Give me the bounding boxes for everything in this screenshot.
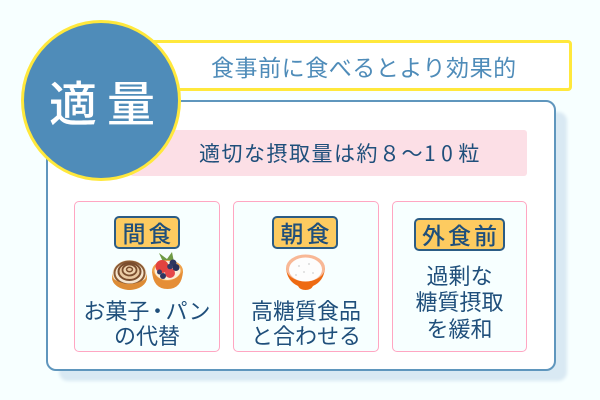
subheading text: 食事前に食べるとより効果的	[211, 49, 517, 83]
subheading banner	[140, 40, 572, 91]
title text: 適量	[49, 65, 165, 135]
badge: before eating out: 外食前	[422, 217, 500, 251]
icon: berry tart	[152, 252, 183, 289]
dosage bar	[130, 130, 527, 176]
card text: eating out line 1: 過剰な	[426, 259, 492, 291]
badge: snacks: 間食	[122, 215, 174, 249]
card: snacks	[74, 201, 220, 352]
card: breakfast	[233, 201, 379, 352]
card text: snacks line 2: の代替	[114, 319, 180, 351]
card text: eating out line 2: 糖質摂取	[415, 285, 504, 317]
panel: main content	[46, 100, 556, 371]
icon: rice bowl	[286, 254, 325, 290]
icon: cinnamon roll	[112, 260, 147, 290]
card text: breakfast line 2: と合わせる	[251, 319, 361, 351]
card text: eating out line 3: を緩和	[426, 312, 492, 344]
dosage text: 適切な摂取量は約８～10粒	[199, 138, 481, 168]
title circle	[21, 20, 181, 181]
card text: breakfast line 1: 高糖質食品	[251, 294, 361, 326]
badge: breakfast: 朝食	[280, 215, 332, 249]
card: before eating out	[392, 201, 527, 352]
card text: snacks line 1: お菓子・パン	[83, 294, 211, 326]
